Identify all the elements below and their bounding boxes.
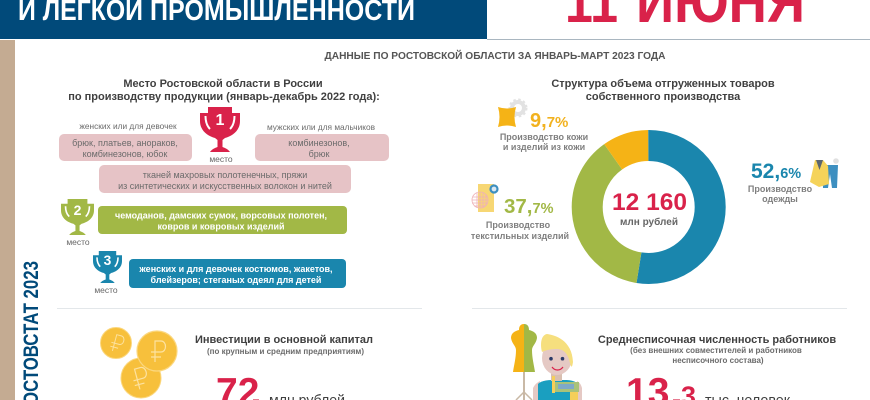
icon: trophy third place: 3 (104, 253, 112, 268)
box: fabrics (99, 165, 351, 193)
heading: place in Russia: по производству продукции (январь-декабрь 2022 года): (68, 91, 380, 103)
icon: trophy first place (200, 107, 240, 152)
box: second place products: чемоданов, дамских сумок, ворсовых полотен, (115, 210, 327, 220)
label: clothing: Производство (748, 184, 813, 194)
value mark: employees (673, 399, 680, 400)
header date (487, 0, 870, 40)
box: men's products: брюк (309, 149, 329, 159)
icon: trophy first place: 1 (216, 112, 225, 129)
value: textile share: 37,7% (504, 195, 554, 218)
donut chart (587, 146, 710, 268)
icon: trophy third place (93, 251, 122, 283)
box: second place products (98, 206, 347, 234)
label: leather: и изделий из кожи (503, 142, 585, 152)
icon: leather hide and gear (498, 100, 526, 127)
icon: trophy second place: 2 (74, 202, 82, 218)
note: employees: несписочного состава) (672, 356, 764, 365)
donut unit: млн рублей (620, 216, 678, 228)
box: women's products (59, 134, 192, 161)
label: clothing (748, 184, 813, 204)
label: first place: место (209, 154, 233, 164)
icon: tailor mannequin and seamstress (511, 324, 582, 400)
icon: trophy second place (61, 199, 94, 235)
note: employees: (без внешних совместителей и работников (630, 346, 802, 355)
label: men's: мужских или для мальчиков (267, 122, 376, 132)
label: second place: место (66, 237, 90, 247)
header band: blue title (0, 0, 487, 39)
note: investment: (по крупным и средним предприятиям) (207, 347, 364, 356)
heading: place in Russia: Место Ростовской области в России (123, 78, 323, 90)
box: fabrics: тканей махровых полотенечных, пряжи (143, 170, 307, 180)
label: textile (471, 220, 569, 241)
box: third place products (129, 259, 346, 288)
heading: shipment structure: собственного производства (586, 91, 741, 103)
icon: jacket and trousers (810, 158, 839, 188)
label: textile: текстильных изделий (471, 231, 569, 241)
label: leather: Производство кожи (500, 132, 588, 142)
note: employees (630, 346, 802, 365)
heading: place in Russia (68, 78, 380, 103)
panel: shipment structure (471, 78, 839, 268)
value mark: investment (253, 399, 259, 400)
box: third place products: женских и для девочек костюмов, жакетов, (138, 264, 333, 274)
label: third place: место (94, 285, 118, 295)
box: third place products: блейзеров; стеганых одеял для детей (151, 275, 321, 285)
heading: employees: Среднесписочная численность работников (598, 334, 836, 346)
value: clothing share: 52,6% (751, 160, 801, 183)
icon: textile grid (472, 184, 498, 212)
label: leather (500, 132, 588, 152)
heading: shipment structure: Структура объема отгруженных товаров (551, 78, 775, 90)
divider left (57, 308, 422, 309)
label: women's: женских или для девочек (79, 121, 177, 131)
heading: shipment structure (551, 78, 775, 103)
box: fabrics: из синтетических и искусственных волокон и нитей (118, 181, 332, 191)
subtitle: ДАННЫЕ ПО РОСТОВСКОЙ ОБЛАСТИ ЗА ЯНВАРЬ-МАРТ 2023 ГОДА (324, 50, 666, 62)
box: women's products: комбинезонов, юбок (83, 149, 167, 159)
heading: investment: Инвестиции в основной капитал (195, 334, 373, 346)
value: leather share: 9,7% (530, 110, 568, 132)
panel: employees (511, 324, 836, 400)
box: men's products (255, 134, 389, 161)
icon: ruble coins (100, 328, 177, 398)
donut total: 12 160 (612, 189, 687, 216)
label: clothing: одежды (762, 194, 798, 204)
sidebar with vertical source label (0, 40, 43, 400)
box: women's products: брюк, платьев, анораков, (72, 138, 178, 148)
box: second place products: ковров и ковровых изделий (157, 222, 285, 232)
divider right (472, 308, 847, 309)
panel: place in Russia (59, 78, 389, 295)
label: textile: Производство (486, 220, 551, 230)
panel: investment (100, 328, 373, 400)
box: men's products: комбинезонов, (288, 138, 350, 148)
